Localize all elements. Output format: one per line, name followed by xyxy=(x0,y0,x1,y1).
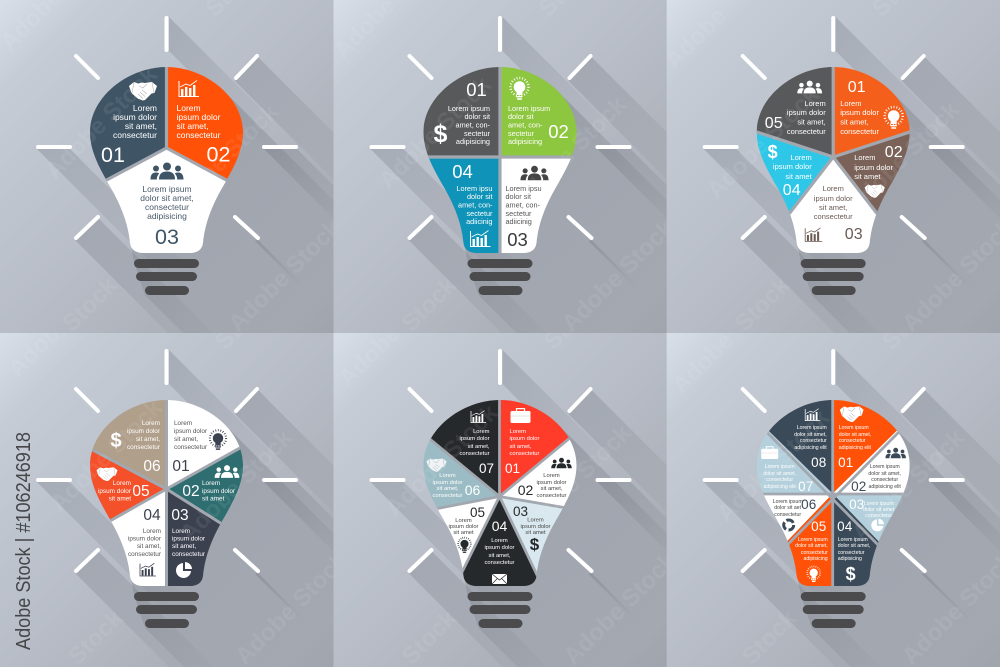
text: segment 03: consectetur xyxy=(865,513,892,519)
text: segment 03: Lorem ipsum xyxy=(142,184,192,194)
text: segment 07: Lorem xyxy=(473,429,490,435)
text: segment 05: sit amet xyxy=(453,530,474,536)
text: segment 01: Lorem xyxy=(133,103,157,113)
number 03: 03 xyxy=(171,507,189,524)
text: segment 02: Lorem xyxy=(202,480,220,487)
number 05: 05 xyxy=(470,505,485,520)
number 06: 06 xyxy=(801,497,816,512)
number 07: 07 xyxy=(479,461,494,476)
number 07: 07 xyxy=(798,479,813,494)
text: segment 01: amet, con- xyxy=(456,120,491,130)
text: segment 05: sit amet xyxy=(109,496,131,502)
number 02: 02 xyxy=(885,144,903,161)
text: segment 02: amet, con- xyxy=(508,120,543,130)
number 03: 03 xyxy=(507,229,528,250)
panel 6 background xyxy=(667,333,1000,667)
watermarks xyxy=(90,69,242,216)
icon: bulb xyxy=(807,566,820,582)
icon: chart xyxy=(470,230,490,246)
text: segment 05: ipsum dolor xyxy=(98,488,132,495)
icon: chart xyxy=(140,563,156,576)
watermarks: Stock xyxy=(730,271,796,337)
panel 4 long shadows xyxy=(37,350,368,667)
watermarks: Adobe Stock xyxy=(161,98,284,221)
panel 4 background xyxy=(0,333,334,667)
number 03: 03 xyxy=(845,226,863,243)
text: segment 05: dolor sit amet, xyxy=(795,543,828,549)
text: segment 03: sectetur xyxy=(506,209,532,218)
text: segment 01: consectetur xyxy=(840,127,879,136)
number 03: 03 xyxy=(513,504,528,519)
watermarks: Adobe xyxy=(660,2,732,74)
panel 4 bulb base xyxy=(134,592,199,628)
panel 5 long shadows xyxy=(370,350,702,667)
watermarks: Stock xyxy=(210,289,276,355)
watermarks: Adobe Stock xyxy=(40,61,163,184)
number 02: 02 xyxy=(207,142,230,166)
text: segment 01: sit amet, xyxy=(174,436,198,443)
icon: people xyxy=(885,448,906,458)
icon: envelope xyxy=(492,574,507,584)
watermarks: Adobe Stock xyxy=(45,394,168,517)
icon: chart xyxy=(805,228,822,241)
text: segment 04: ipsum dolor xyxy=(128,536,162,542)
panel: six-step bulb xyxy=(0,333,334,667)
panel 2 long shadows xyxy=(370,17,702,360)
watermarks: Adobe Stock xyxy=(175,424,298,547)
text: segment 04: sit amet xyxy=(785,172,813,181)
text: segment 06: consectetur xyxy=(433,493,463,499)
watermarks: Stock xyxy=(877,289,943,355)
text: segment 04: consectetur xyxy=(838,550,865,556)
panel 5 bulb segments xyxy=(424,400,576,586)
text: segment 02: ipsum dolor xyxy=(854,163,893,172)
panel 5 background xyxy=(334,333,667,667)
text: segment 02: sectetur xyxy=(508,129,535,138)
number 01: 01 xyxy=(838,455,853,470)
number 05: 05 xyxy=(132,483,150,500)
text: segment 07: sit amet, xyxy=(468,444,490,450)
number 04: 04 xyxy=(452,161,473,182)
text: segment 02: Lorem ipsum xyxy=(870,464,900,470)
text: segment 02: dolor sit amet, xyxy=(868,471,901,477)
panel 1 long shadows xyxy=(37,17,368,360)
number 05: 05 xyxy=(765,115,783,132)
panel 2 light rays xyxy=(372,18,630,238)
text: segment 01: ipsum dolor xyxy=(840,108,879,117)
text: segment 01: dolor sit xyxy=(464,112,490,121)
icon: handshake xyxy=(840,406,864,422)
number 08: 08 xyxy=(811,455,826,470)
text: segment 04: Lorem ipsu xyxy=(456,184,492,193)
text: segment 01: Lorem xyxy=(840,99,861,108)
number 06: 06 xyxy=(143,458,161,475)
panel 2 bulb segments xyxy=(424,67,576,253)
icon: handshake xyxy=(96,467,118,481)
text: segment 01: sit amet, xyxy=(125,121,157,131)
watermarks: Adobe Stock xyxy=(847,424,970,547)
icon: people xyxy=(215,465,239,478)
number 04: 04 xyxy=(837,519,853,534)
text: segment 01: adipisicing xyxy=(456,137,490,146)
watermarks xyxy=(424,78,576,199)
panel 1 bulb base xyxy=(134,259,199,295)
icon: cycle xyxy=(784,520,794,530)
panel 5 light rays xyxy=(372,351,630,571)
watermarks: Adobe Stock xyxy=(559,547,682,667)
text: segment 02: Lorem xyxy=(176,103,201,113)
text: segment 03: adipisicing xyxy=(147,211,187,221)
panel: three-step bulb xyxy=(0,0,334,333)
text: segment 06: sit amet, xyxy=(437,486,459,492)
text: segment 06: Lorem xyxy=(439,473,456,479)
text: segment 02: ipsum dolor xyxy=(176,112,221,122)
text: segment 04: sectetur xyxy=(467,209,493,218)
number 06: 06 xyxy=(465,482,480,498)
panel: seven-step bulb xyxy=(334,333,667,667)
panel 2 background xyxy=(334,0,667,334)
text: segment 04: ipsum dolor xyxy=(773,162,812,171)
text: segment 03: ipsum dolor xyxy=(814,194,853,203)
text: segment 05: consectetur xyxy=(801,550,828,556)
text: segment 03: amet, con- xyxy=(506,200,541,210)
text: segment 04: adipisicing xyxy=(838,556,862,562)
text: segment 05: consectetur xyxy=(787,127,826,136)
text: segment 05: sit amet, xyxy=(797,118,826,126)
text: segment 02: ipsum dolor xyxy=(537,480,567,486)
text: segment 08: dolor sit amet, xyxy=(794,432,827,438)
text: segment 07: consectetur xyxy=(766,477,793,483)
icon: dollar: $ xyxy=(434,120,448,148)
text: segment 01: consectetur xyxy=(174,444,208,451)
panel: five-step bulb xyxy=(660,0,1000,360)
text: segment 01: sit amet, xyxy=(840,118,869,126)
watermarks: Adobe Stock xyxy=(381,399,504,522)
watermarks: Adobe Stock xyxy=(702,81,825,204)
text: segment 04: consectetur xyxy=(485,560,515,566)
vertical credit text: Adobe Stock | #106246918 xyxy=(13,432,35,650)
text: segment 03: sit amet, xyxy=(819,203,847,212)
text: segment 03: dolor sit amet xyxy=(863,507,895,513)
text: segment 03: Lorem xyxy=(527,518,544,524)
text: segment 03: adiicinig xyxy=(506,217,532,226)
icon: pie chart xyxy=(871,519,884,531)
text: segment 02: adipisicing elit xyxy=(869,484,901,490)
text: segment 05: Lorem xyxy=(113,480,131,487)
text: segment 04: Lorem ipsum xyxy=(838,537,868,543)
icon: handshake xyxy=(426,459,447,472)
text: segment 06: sit amet, xyxy=(136,436,160,443)
text: segment 01: sit amet, xyxy=(510,444,532,450)
watermarks: Adobe Stock xyxy=(509,91,632,214)
icon: handshake xyxy=(865,185,885,198)
icon: people xyxy=(150,162,184,180)
number 03: 03 xyxy=(155,225,179,249)
panel: eight-step bulb xyxy=(666,333,1000,667)
watermarks: Adobe xyxy=(3,310,75,382)
number 01: 01 xyxy=(505,461,520,476)
panel 1 bulb segments xyxy=(90,67,243,253)
watermarks: Adobe Stock xyxy=(514,419,637,542)
text: segment 03: dolor sit xyxy=(506,192,531,201)
text: segment 02: Lorem xyxy=(543,473,560,479)
icon: dollar: $ xyxy=(768,142,778,162)
text: segment 01: consectetur xyxy=(113,130,157,140)
icon: pie chart xyxy=(176,562,192,578)
text: segment 02: adipisicing xyxy=(508,137,542,146)
panel 1 light rays xyxy=(38,18,296,238)
text: segment 04: Lorem xyxy=(143,528,161,535)
watermarks: Stock xyxy=(539,289,604,355)
text: segment 02: consectetur xyxy=(871,477,898,483)
text: segment 06: Lorem ipsum xyxy=(773,499,803,505)
text: segment 08: consectetur xyxy=(800,438,827,444)
text: segment 07: consectetur xyxy=(460,451,490,457)
number 04: 04 xyxy=(783,182,801,199)
watermarks: Adobe xyxy=(667,327,739,399)
text: segment 03: dolor sit amet, xyxy=(140,193,194,203)
watermarks: Adobe Stock xyxy=(374,71,497,194)
text: segment 05: ipsum dolor xyxy=(449,524,479,530)
text: segment 05: Lorem ipsum xyxy=(798,537,828,543)
text: segment 01: Lorem xyxy=(510,429,526,435)
panel 1 background xyxy=(0,0,334,334)
icon: bulb xyxy=(885,107,903,129)
text: segment 01: adipisicing elit xyxy=(839,445,872,451)
text: segment 06: consectetur xyxy=(774,512,801,518)
panel 4 bulb segments xyxy=(90,400,243,586)
text: segment 03: consectetur xyxy=(814,212,853,221)
text: segment 01: sectetur xyxy=(464,129,491,138)
watermarks xyxy=(758,91,909,200)
text: segment 01: dolor sit amet, xyxy=(839,432,871,438)
panel 2 bulb base xyxy=(468,259,532,295)
text: segment 04: adiicinig xyxy=(466,217,492,226)
text: segment 05: Lorem xyxy=(804,99,826,108)
watermarks xyxy=(784,411,900,542)
text: segment 01: ipsum dolor xyxy=(510,436,540,442)
text: segment 02: sit amet xyxy=(202,496,225,502)
panel 6 light rays xyxy=(705,351,963,571)
icon: briefcase xyxy=(761,447,778,459)
watermarks xyxy=(90,456,243,542)
panel 3 background xyxy=(667,0,1000,334)
text: segment 06: consectetur xyxy=(127,444,161,451)
icon: people xyxy=(520,166,549,180)
number 02: 02 xyxy=(548,121,569,142)
text: segment 08: Lorem ipsum xyxy=(797,425,827,431)
text: segment 07: dolor sit amet, xyxy=(763,471,796,477)
text: segment 04: Lorem xyxy=(491,538,508,544)
watermarks: Adobe Stock xyxy=(557,214,680,337)
number 01: 01 xyxy=(101,143,125,167)
icon: bulb xyxy=(458,538,471,553)
text: segment 03: ipsum dolor xyxy=(172,536,206,542)
number 01: 01 xyxy=(848,79,866,96)
text: segment 03: sit amet xyxy=(525,530,546,536)
watermarks: Adobe xyxy=(334,320,406,392)
text: segment 03: Lorem ipsu xyxy=(506,184,542,193)
text: segment 02: consectetur xyxy=(176,130,221,140)
number 03: 03 xyxy=(849,497,864,512)
icon: people xyxy=(797,81,822,93)
text: segment 03: Lorem xyxy=(823,184,844,193)
text: segment 04: sit amet, xyxy=(137,543,161,550)
watermarks: Stock xyxy=(397,271,462,337)
icon: people xyxy=(551,458,572,468)
text: segment 05: Lorem xyxy=(455,518,472,524)
text: segment 02: sit amet, xyxy=(541,486,563,492)
text: segment 07: Lorem ipsum xyxy=(765,464,795,470)
icon: briefcase xyxy=(510,409,530,423)
icon: handshake xyxy=(129,82,157,100)
number 04: 04 xyxy=(143,507,161,524)
watermarks: Adobe Stock xyxy=(712,404,835,527)
text: segment 06: ipsum dolor xyxy=(433,480,463,486)
watermarks: Adobe Stock xyxy=(230,547,353,667)
text: segment 05: adipisicing xyxy=(803,556,828,562)
text: segment 02: sit amet, xyxy=(176,121,209,131)
icon: dollar: $ xyxy=(530,535,540,554)
text: segment 04: Lorem xyxy=(790,153,812,162)
text: segment 01: Lorem xyxy=(174,420,192,427)
text: segment 04: ipsum dolor xyxy=(485,545,515,551)
text: segment 03: Lorem xyxy=(172,528,190,535)
text: segment 06: Lorem xyxy=(142,420,160,427)
watermarks: Stock xyxy=(57,271,123,337)
text: segment 03: Lorem ipsum xyxy=(864,501,894,507)
text: segment 08: adipisicing elit xyxy=(794,445,827,451)
text: segment 03: consectetur xyxy=(172,551,206,558)
text: segment 04: dolor sit xyxy=(467,192,492,201)
text: segment 04: sit amet, xyxy=(489,553,511,559)
panel 3 bulb segments xyxy=(756,67,910,253)
text: segment 03: ipsum dolor xyxy=(521,524,551,530)
icon: dollar: $ xyxy=(110,430,122,452)
text: segment 03: consectetur xyxy=(145,202,189,212)
panel 3 light rays xyxy=(705,18,963,238)
text: segment 07: adipisicing elit xyxy=(764,484,796,490)
panel 6 long shadows xyxy=(704,350,1000,667)
number 01: 01 xyxy=(172,458,190,475)
number 02: 02 xyxy=(518,482,533,498)
text: segment 04: consectetur xyxy=(128,551,162,558)
text: segment 02: Lorem xyxy=(854,153,875,162)
panel 6 bulb segments xyxy=(757,400,910,586)
icon: dollar: $ xyxy=(846,564,856,584)
text: segment 04: dolor sit amet, xyxy=(838,543,870,549)
text: segment 01: Lorem ipsum xyxy=(839,425,869,431)
number 04: 04 xyxy=(492,518,507,534)
icon: bulb xyxy=(510,78,528,100)
panel 5 bulb base xyxy=(468,592,532,628)
icon: growth chart xyxy=(179,80,199,96)
icon: bulb xyxy=(210,430,226,450)
text: segment 01: ipsum dolor xyxy=(113,112,157,122)
text: segment 02: dolor sit xyxy=(508,112,534,121)
watermarks: Adobe Stock xyxy=(842,96,965,219)
number 02: 02 xyxy=(851,479,866,494)
panel 3 bulb base xyxy=(801,259,866,295)
number 02: 02 xyxy=(182,483,200,500)
watermarks xyxy=(444,406,566,534)
text: segment 01: consectetur xyxy=(510,451,540,457)
text: segment 01: ipsum dolor xyxy=(174,428,208,435)
text: segment 07: ipsum dolor xyxy=(460,436,490,442)
panel 3 long shadows xyxy=(704,17,1000,360)
icon: chart xyxy=(805,409,820,421)
text: segment 06: ipsum dolor xyxy=(127,428,161,435)
text: segment 02: sit amet xyxy=(854,172,881,181)
text: segment 02: ipsum dolor xyxy=(202,488,236,495)
panel 4 light rays xyxy=(38,351,296,571)
text: segment 06: dolor sit aet xyxy=(774,505,802,511)
text: segment 01: Lorem ipsum xyxy=(448,104,490,113)
text: segment 04: amet, con- xyxy=(458,200,493,210)
text: segment 03: sit amet, xyxy=(172,543,196,550)
text: segment 02: Lorem ipsum xyxy=(508,104,550,113)
icon: chart xyxy=(471,411,486,423)
panel 6 bulb base xyxy=(801,592,866,628)
text: segment 02: consectetur xyxy=(537,493,567,499)
number 01: 01 xyxy=(466,79,487,100)
watermarks: Adobe Stock xyxy=(223,214,346,337)
panel: four-step bulb xyxy=(334,0,667,333)
text: segment 05: ipsum dolor xyxy=(787,108,826,117)
text: segment 01: consectetur xyxy=(839,438,866,444)
number 05: 05 xyxy=(811,519,826,534)
